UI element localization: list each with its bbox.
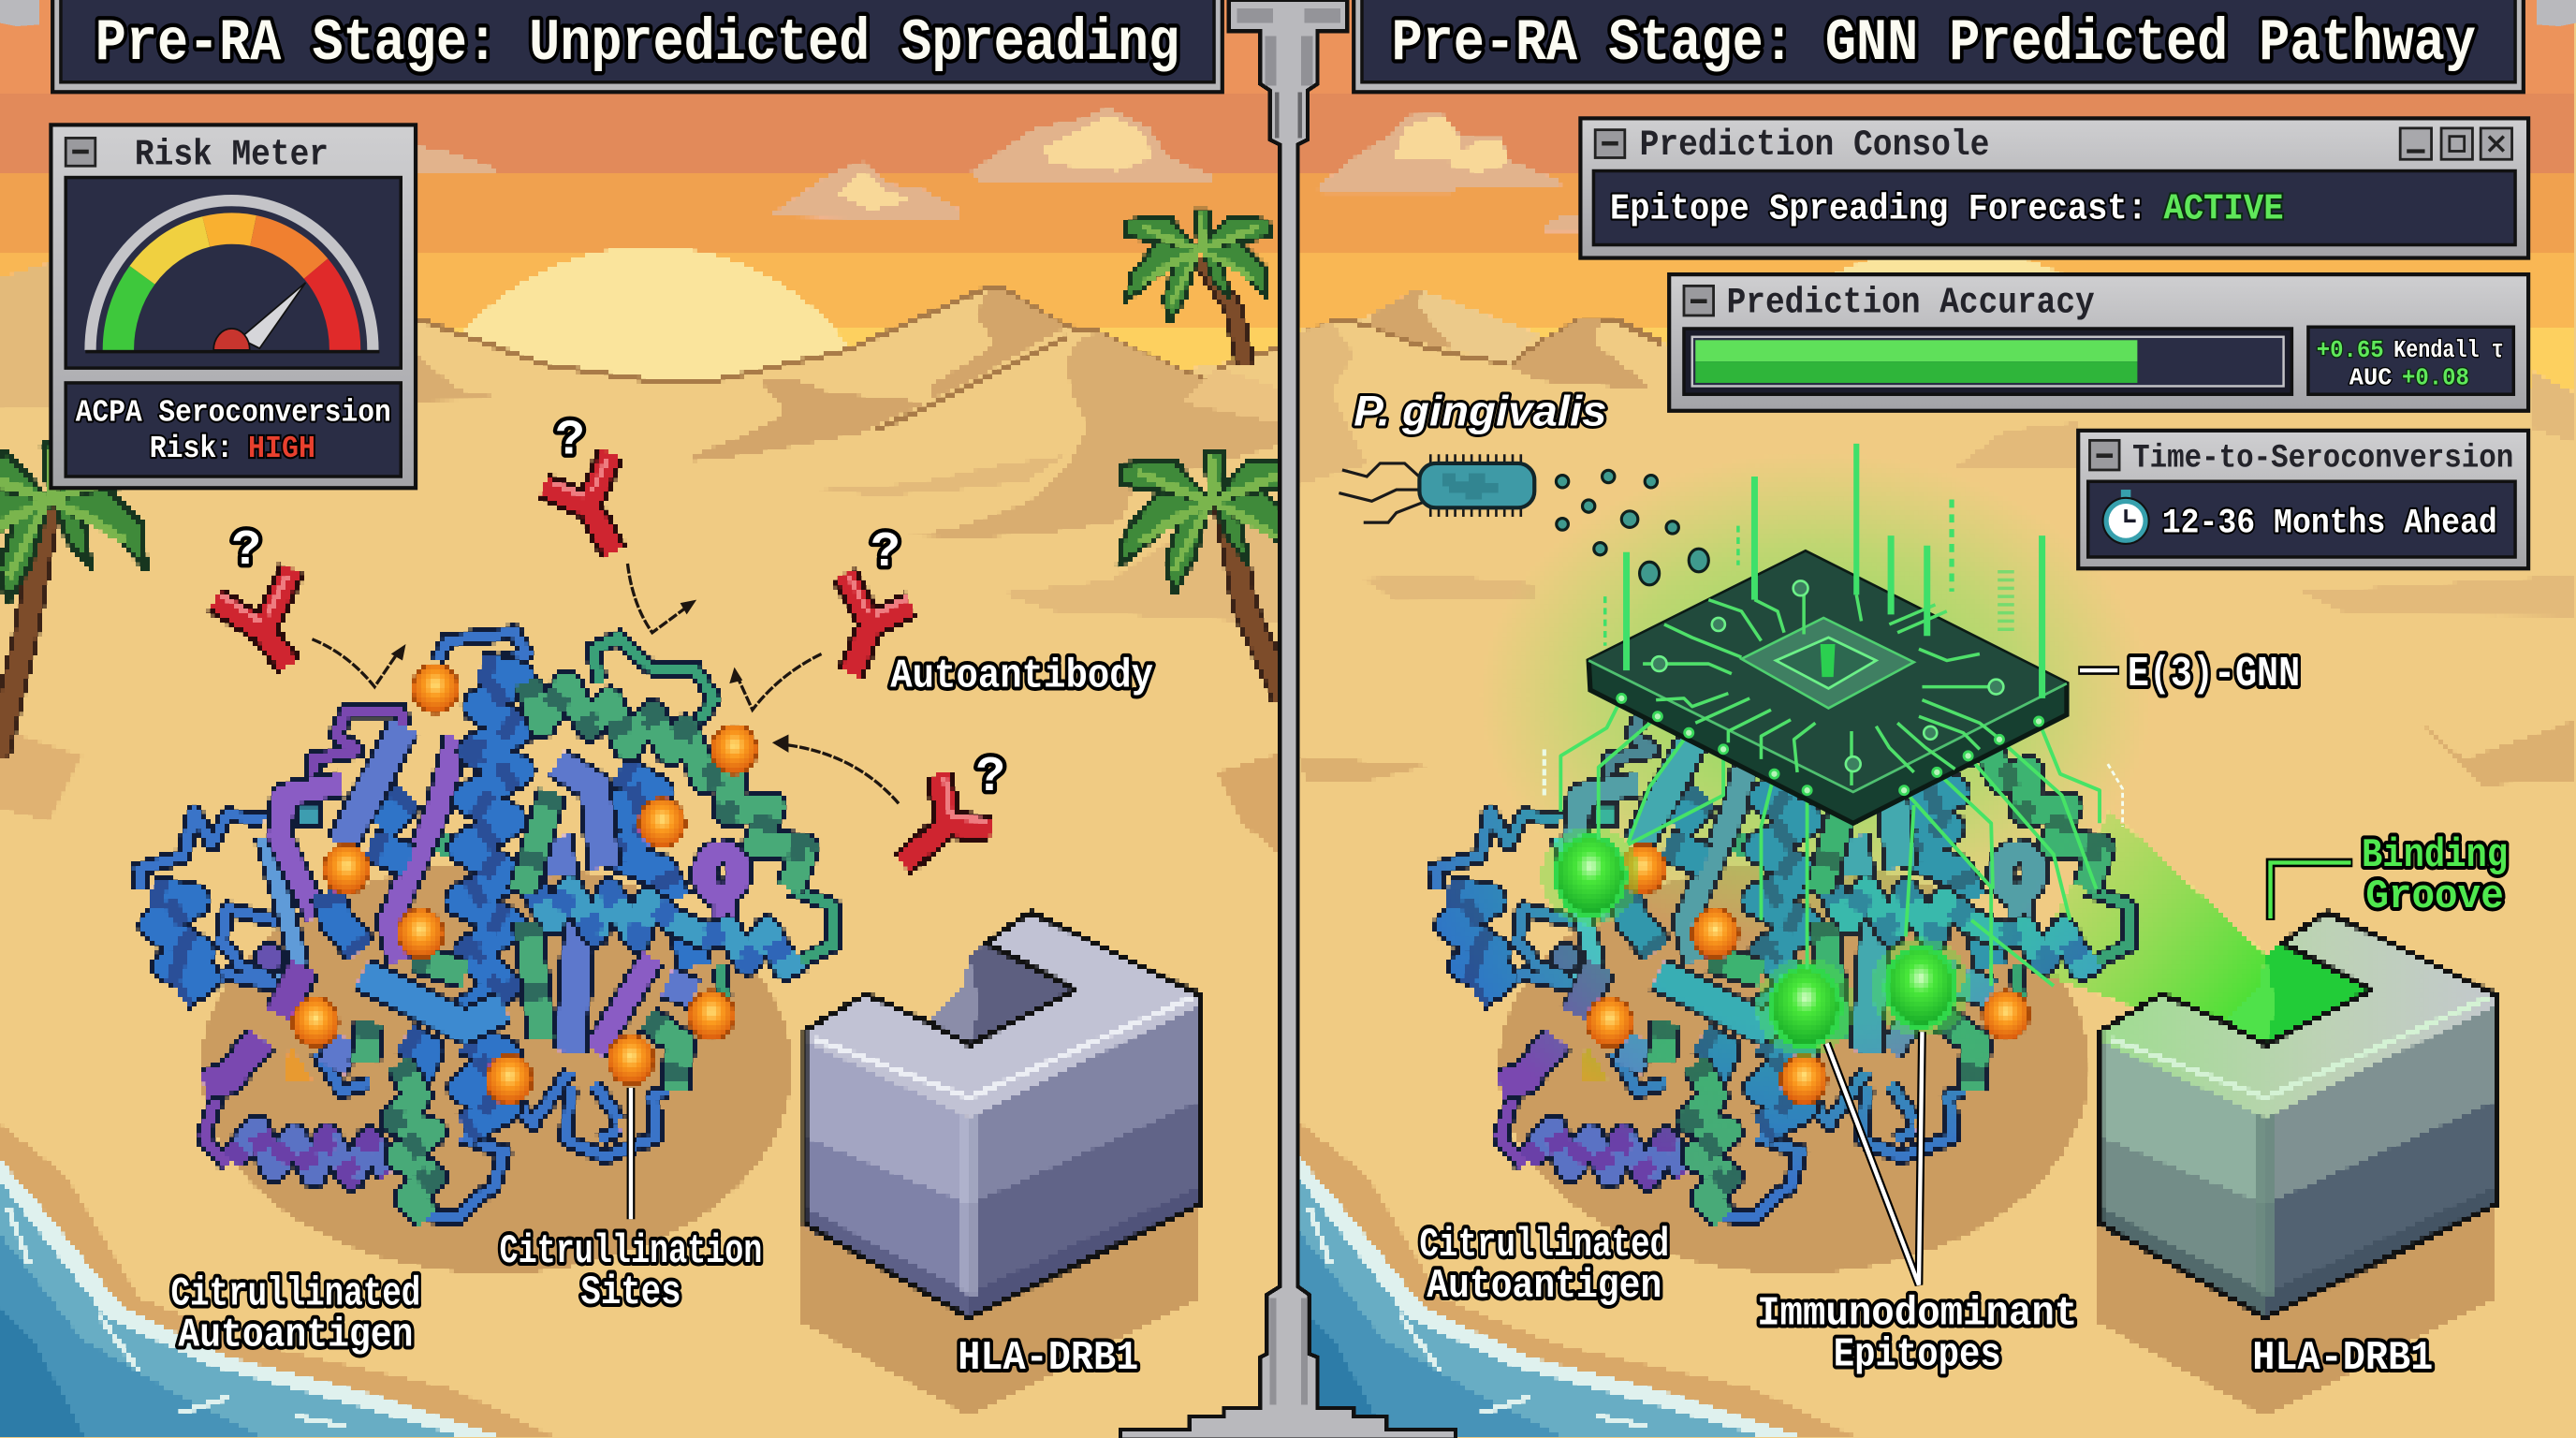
panel: risk meter window: [51, 125, 416, 488]
label: Citrullinated Autoantigen (left): Citrullinated: [171, 1271, 420, 1318]
accuracy metrics: Kendall τ: [2393, 336, 2504, 364]
icon: stopwatch: [2103, 490, 2149, 544]
label: P. gingivalis: P. gingivalis: [1354, 388, 1606, 435]
label: Binding Groove with leader: Groove: [2365, 873, 2504, 920]
window control buttons: [2400, 128, 2512, 159]
label: HLA-DRB1 right: HLA-DRB1: [2252, 1335, 2433, 1382]
countdown display: [2088, 481, 2515, 557]
label: Autoantibody: Autoantibody: [890, 653, 1153, 700]
released peptide particles: [1556, 470, 1708, 585]
icon: autoantibody 1: [215, 568, 292, 666]
water and shoreline: [0, 1117, 575, 1438]
shadow under protein: [200, 862, 792, 1273]
label: Citrullinated Autoantigen (right): Citrullinated: [1419, 1222, 1669, 1269]
accuracy metrics: +0.08: [2402, 364, 2469, 392]
forecast status: [1593, 171, 2515, 245]
chip connector pins: [1617, 694, 2043, 795]
accuracy metrics: [2308, 327, 2513, 394]
risk text panel: [66, 383, 401, 477]
question marks: ?: [976, 749, 1005, 805]
question marks: ?: [871, 524, 900, 580]
predicted green epitope markers: [1541, 827, 1969, 1057]
shadow under protein: [1499, 862, 2089, 1273]
risk text panel: Risk:: [150, 432, 233, 467]
label: Citrullination Sites: [500, 1228, 762, 1316]
forecast status: ACTIVE: [2163, 188, 2284, 229]
question marks: ?: [231, 522, 261, 579]
heading panel: right title: [1354, 0, 2524, 92]
question marks: ?: [555, 412, 585, 468]
vertical data streams above chip: [1605, 444, 2042, 698]
panel: time-to-seroconversion window: [2078, 431, 2528, 568]
icon: HLA-DRB1 green-lit block: [2098, 912, 2496, 1416]
label: Immunodominant Epitopes: [1757, 1291, 2077, 1378]
countdown display: 12-36 Months Ahead: [2162, 505, 2497, 544]
panel: prediction accuracy window: [1669, 274, 2528, 411]
label: Citrullinated Autoantigen (right): Autoantigen: [1427, 1263, 1661, 1310]
window title: Risk Meter: [135, 135, 329, 176]
water and shoreline: [1293, 1117, 1876, 1438]
background: sky and sun: [1281, 0, 2576, 740]
accuracy progress bar: [1684, 329, 2291, 394]
label: Citrullinated Autoantigen (left): [171, 1271, 420, 1358]
icon: autoantibody 2: [544, 453, 614, 552]
risk text panel: ACPA Seroconversion: [76, 395, 391, 431]
icon: citrullinated autoantigen protein with GNN tint: [1434, 633, 2130, 1218]
label: Immunodominant Epitopes: Epitopes: [1834, 1331, 2001, 1378]
green energy beam to groove: [2029, 810, 2264, 1051]
window title: Prediction Accuracy: [1727, 282, 2095, 323]
icon: palm tree right: [1119, 452, 1301, 698]
window menu button: [66, 138, 95, 166]
gauge display: [66, 178, 401, 368]
label: Citrullinated Autoantigen (left): Autoantigen: [178, 1312, 413, 1358]
icon: autoantibody 4: [902, 774, 990, 864]
panel: prediction console window: [1580, 118, 2528, 258]
citrullination site markers: [292, 664, 757, 1104]
leader: citrullination sites: [628, 1088, 633, 1219]
icon: E(3)-GNN circuit chip: [1588, 552, 2067, 823]
label: Binding Groove with leader: [2271, 832, 2508, 920]
heading panel: left title: [52, 0, 1222, 92]
label: Binding Groove with leader: Binding: [2362, 832, 2508, 879]
window menu button: [2089, 440, 2119, 470]
question marks: [231, 412, 1005, 805]
title text: Pre-RA Stage: Unpredicted Spreading: [95, 9, 1179, 77]
window menu button: [1684, 286, 1714, 315]
icon: citrullinated autoantigen protein: [138, 633, 833, 1218]
forecast status: Epitope Spreading Forecast:: [1610, 188, 2147, 229]
window title: Time-to-Seroconversion: [2132, 439, 2513, 477]
label: E(3)-GNN with leader: E(3)-GNN: [2128, 650, 2300, 698]
label: HLA-DRB1 left: HLA-DRB1: [958, 1335, 1138, 1382]
accuracy metrics: +0.65: [2317, 336, 2384, 364]
gauge needle: [240, 283, 305, 348]
label: Citrullination Sites: Sites: [580, 1269, 681, 1316]
label: Immunodominant Epitopes: Immunodominant: [1757, 1291, 2077, 1338]
leader: immunodominant epitopes: [1827, 1032, 1922, 1284]
background: right dunes: [1281, 291, 2576, 1438]
risk text panel: HIGH: [248, 432, 315, 467]
label: Citrullinated Autoantigen (right): [1419, 1222, 1669, 1310]
icon: P. gingivalis bacterium: [1339, 460, 1534, 522]
arrows: antibody targeting paths: [312, 564, 899, 803]
green connection lines from chip to protein: [1544, 698, 2123, 986]
green glow around chip: [1479, 452, 2152, 945]
label: Citrullination Sites: Citrullination: [500, 1228, 762, 1275]
icon: HLA-DRB1 grey block: [801, 912, 1199, 1416]
accuracy metrics: AUC: [2349, 364, 2393, 392]
citrullination site markers: [1587, 844, 2029, 1104]
clouds: [1316, 113, 1580, 231]
icon: palm tree top right: [1125, 211, 1271, 365]
icon: autoantibody 3: [844, 574, 912, 674]
panel: left desert scene: [0, 0, 1301, 1438]
circuit traces: [1643, 580, 2003, 785]
window menu button: [1595, 130, 1625, 157]
panel: right desert scene: [1281, 0, 2576, 1438]
background: sky, sun and dunes: [0, 0, 1298, 1438]
window title: Prediction Console: [1640, 125, 1989, 166]
icon: palm tree left: [0, 445, 151, 756]
